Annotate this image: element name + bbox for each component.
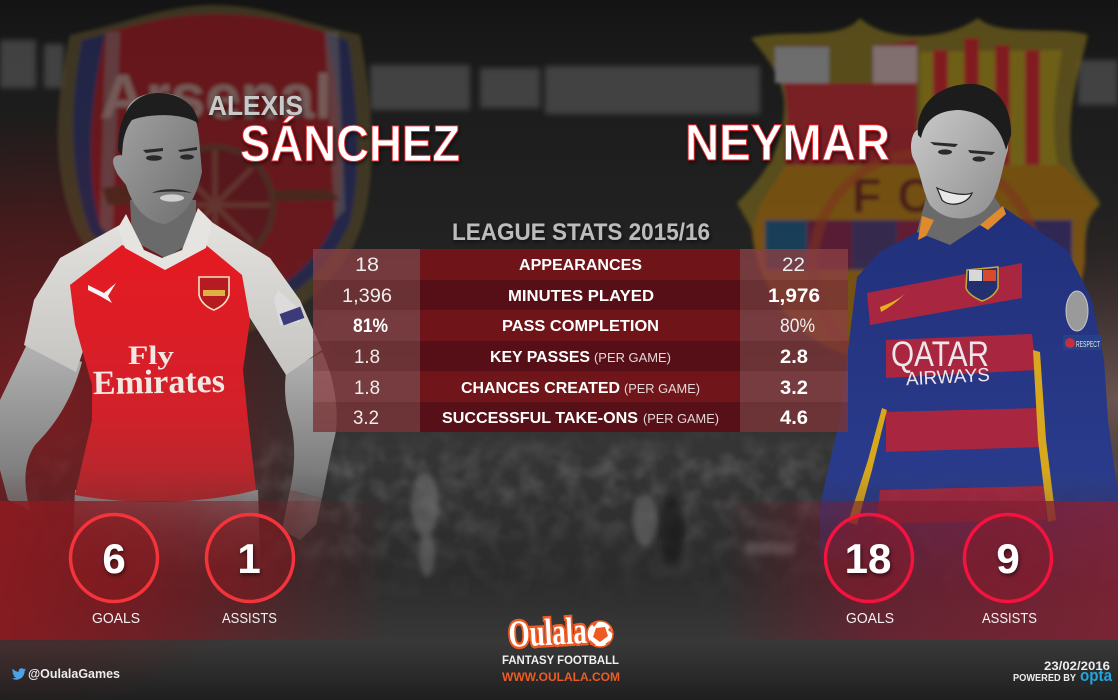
stat: Neymar assists: [964, 514, 1052, 627]
row: key passes: 1.8: [354, 347, 380, 368]
stat: Neymar goals: [826, 514, 912, 627]
crest: Arsenal (blurred): Arsenal: [100, 63, 332, 132]
shirt logos: QATAR: [891, 335, 989, 374]
shirt logos: RESPECT: [1076, 340, 1100, 349]
row: key passes: 2.8: [780, 347, 808, 368]
stat band: Sánchez: [0, 501, 395, 640]
opta logo: opta: [1080, 666, 1112, 685]
logo website: WWW.OULALA.COM: [502, 670, 620, 684]
shirt logos: Fly: [128, 341, 174, 370]
row: successful take-ons: [353, 408, 808, 429]
hair: [918, 84, 1011, 150]
crest: FC Barcelona (blurred): FC: [852, 170, 932, 223]
collar trim: [918, 206, 1006, 240]
stat: Sánchez assists: 1: [237, 535, 261, 582]
row: key passes: [354, 347, 808, 368]
crest: Arsenal (blurred): [58, 5, 372, 335]
logo wordmark: Oulala: [508, 610, 588, 656]
row: key passes: KEY PASSES: [490, 349, 590, 366]
row: minutes played: MINUTES PLAYED: [508, 288, 654, 305]
row: minutes played: 1,976: [768, 286, 820, 307]
stats table: [313, 249, 848, 432]
player: Alexis Sánchez: [0, 93, 336, 550]
heading: Sánchez: SÁNCHEZ: [240, 115, 460, 172]
row: appearances: [355, 255, 805, 276]
twitter handle: @OulalaGames: [28, 666, 120, 681]
stat: Sánchez assists: ASSISTS: [222, 610, 277, 627]
stat: Neymar assists: 9: [996, 535, 1020, 582]
stat: Neymar goals: GOALS: [846, 610, 894, 627]
row: appearances: APPEARANCES: [519, 257, 642, 274]
crest: FC Barcelona (blurred): [737, 18, 1100, 377]
table columns: [313, 249, 848, 432]
shirt body: [70, 245, 256, 502]
head: [113, 93, 202, 224]
row: minutes played: [342, 286, 820, 307]
row: pass completion: 81%: [353, 316, 388, 337]
row: pass completion: [353, 316, 815, 337]
stat: Sánchez goals: 6: [102, 535, 126, 582]
right arm: [285, 352, 337, 498]
right hand: [282, 490, 322, 540]
row: chances created: (PER GAME): [624, 381, 700, 396]
neck: [917, 196, 1002, 245]
player: Neymar: [820, 84, 1118, 600]
row: successful take-ons: SUCCESSFUL TAKE-ONS: [442, 410, 638, 427]
mouth: [160, 194, 184, 202]
stat: Sánchez goals: GOALS: [92, 610, 140, 627]
row: pass completion: PASS COMPLETION: [502, 318, 659, 335]
stat: Sánchez assists: [206, 514, 294, 627]
icon: twitter bird: [12, 668, 26, 680]
row: chances created: 3.2: [780, 378, 808, 399]
facial features: [930, 142, 995, 162]
shirt logos: [880, 267, 1101, 390]
head: [911, 110, 1008, 218]
logo: Oulala: [502, 610, 620, 684]
row: chances created: [354, 378, 808, 399]
shirt: [820, 208, 1118, 561]
left arm: [0, 342, 82, 510]
stat band: Neymar: [720, 501, 1118, 640]
shorts: [74, 490, 260, 550]
collar: [118, 208, 212, 270]
heading: Alexis: ALEXIS: [208, 90, 303, 121]
shirt sleeves: [24, 218, 322, 375]
row: appearances: 18: [355, 255, 379, 276]
icon: football: [587, 621, 613, 647]
heading: league stats: LEAGUE STATS 2015/16: [452, 219, 710, 246]
row: pass completion: 80%: [780, 316, 815, 337]
date: 23/02/2016: [1044, 659, 1110, 673]
smile: [937, 188, 972, 204]
logo tagline: FANTASY FOOTBALL: [502, 653, 619, 667]
heading: Neymar: NEYMAR: [685, 114, 890, 171]
shirt logos: [88, 277, 304, 402]
powered by: POWERED BY: [1013, 673, 1076, 684]
facial features: [143, 147, 197, 193]
neck: [130, 200, 196, 258]
row: appearances: 22: [782, 255, 805, 276]
row: key passes: (PER GAME): [594, 350, 671, 365]
shirt logos: AIRWAYS: [905, 365, 990, 390]
shirt piping: [848, 350, 1056, 525]
stat: Neymar assists: ASSISTS: [982, 610, 1037, 627]
row: successful take-ons: 4.6: [780, 408, 808, 429]
shirt stripes: [867, 263, 1046, 524]
row: successful take-ons: 3.2: [353, 408, 379, 429]
row: chances created: CHANCES CREATED: [461, 380, 620, 397]
row: minutes played: 1,396: [342, 286, 392, 307]
row: successful take-ons: (PER GAME): [643, 411, 719, 426]
hair: [118, 93, 199, 156]
stat: Sánchez goals: [70, 514, 158, 627]
stat: Neymar goals: 18: [845, 535, 891, 582]
row: chances created: 1.8: [354, 378, 380, 399]
shirt logos: Emirates: [93, 363, 225, 402]
